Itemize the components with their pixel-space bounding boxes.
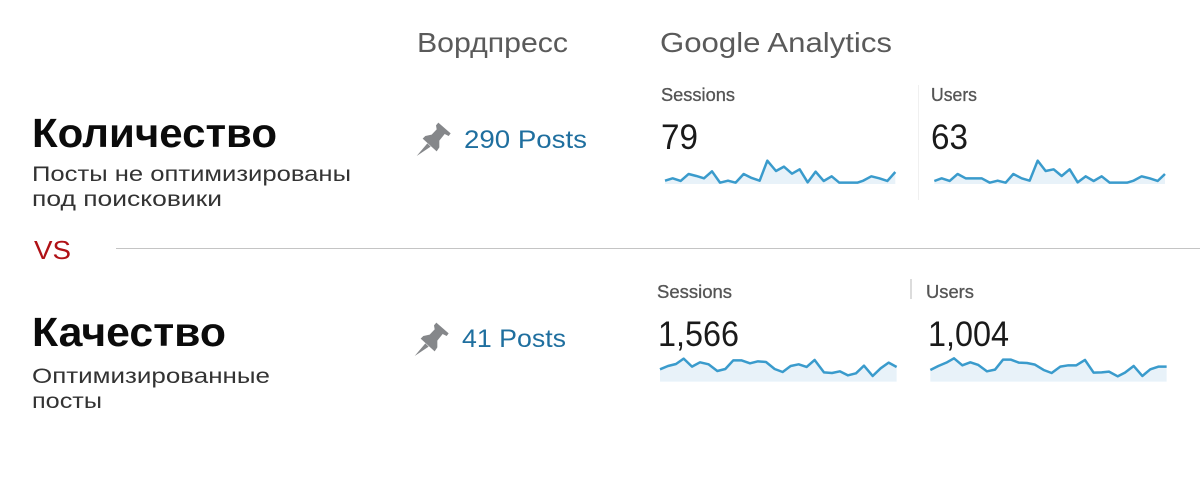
description: quality: посты bbox=[32, 390, 102, 413]
metric: sessions: 1,566 bbox=[658, 315, 739, 354]
metric: users: Users bbox=[931, 85, 977, 105]
metric: users: Users bbox=[926, 282, 974, 302]
icon: pushpin bbox=[415, 323, 449, 356]
icon: pushpin bbox=[417, 123, 451, 156]
sparkline: users bbox=[930, 358, 1167, 382]
column header: Google Analytics: Google Analytics bbox=[660, 27, 892, 58]
description: quantity bbox=[32, 163, 351, 211]
vs label: VS bbox=[34, 235, 71, 265]
heading: quality: Качество bbox=[32, 309, 226, 355]
sparkline: sessions bbox=[665, 161, 895, 184]
panel: quantity row bbox=[32, 85, 1165, 211]
post count: 41 posts: 41 Posts bbox=[462, 325, 566, 353]
metric: sessions bbox=[657, 282, 897, 382]
heading: quantity: Количество bbox=[32, 110, 277, 156]
description: quality: Оптимизированные bbox=[32, 365, 270, 388]
metric: sessions: 79 bbox=[661, 118, 698, 157]
description: quantity: под поисковики bbox=[32, 188, 222, 211]
metric: users: 63 bbox=[931, 118, 968, 157]
metric: sessions: Sessions bbox=[661, 85, 735, 105]
metric: users bbox=[931, 85, 1165, 184]
post count: 290 posts: 290 Posts bbox=[464, 126, 587, 154]
column header: WordPress: Вордпресс bbox=[417, 27, 568, 58]
panel: quality row bbox=[32, 279, 1167, 413]
description: quantity: Посты не оптимизированы bbox=[32, 163, 351, 186]
metric: users bbox=[926, 282, 1167, 382]
sparkline: users bbox=[934, 161, 1165, 184]
metric: users: 1,004 bbox=[928, 315, 1009, 354]
description: quality bbox=[32, 365, 270, 413]
metric: sessions: Sessions bbox=[657, 282, 732, 302]
sparkline: sessions bbox=[660, 359, 897, 382]
metric: sessions bbox=[661, 85, 895, 184]
